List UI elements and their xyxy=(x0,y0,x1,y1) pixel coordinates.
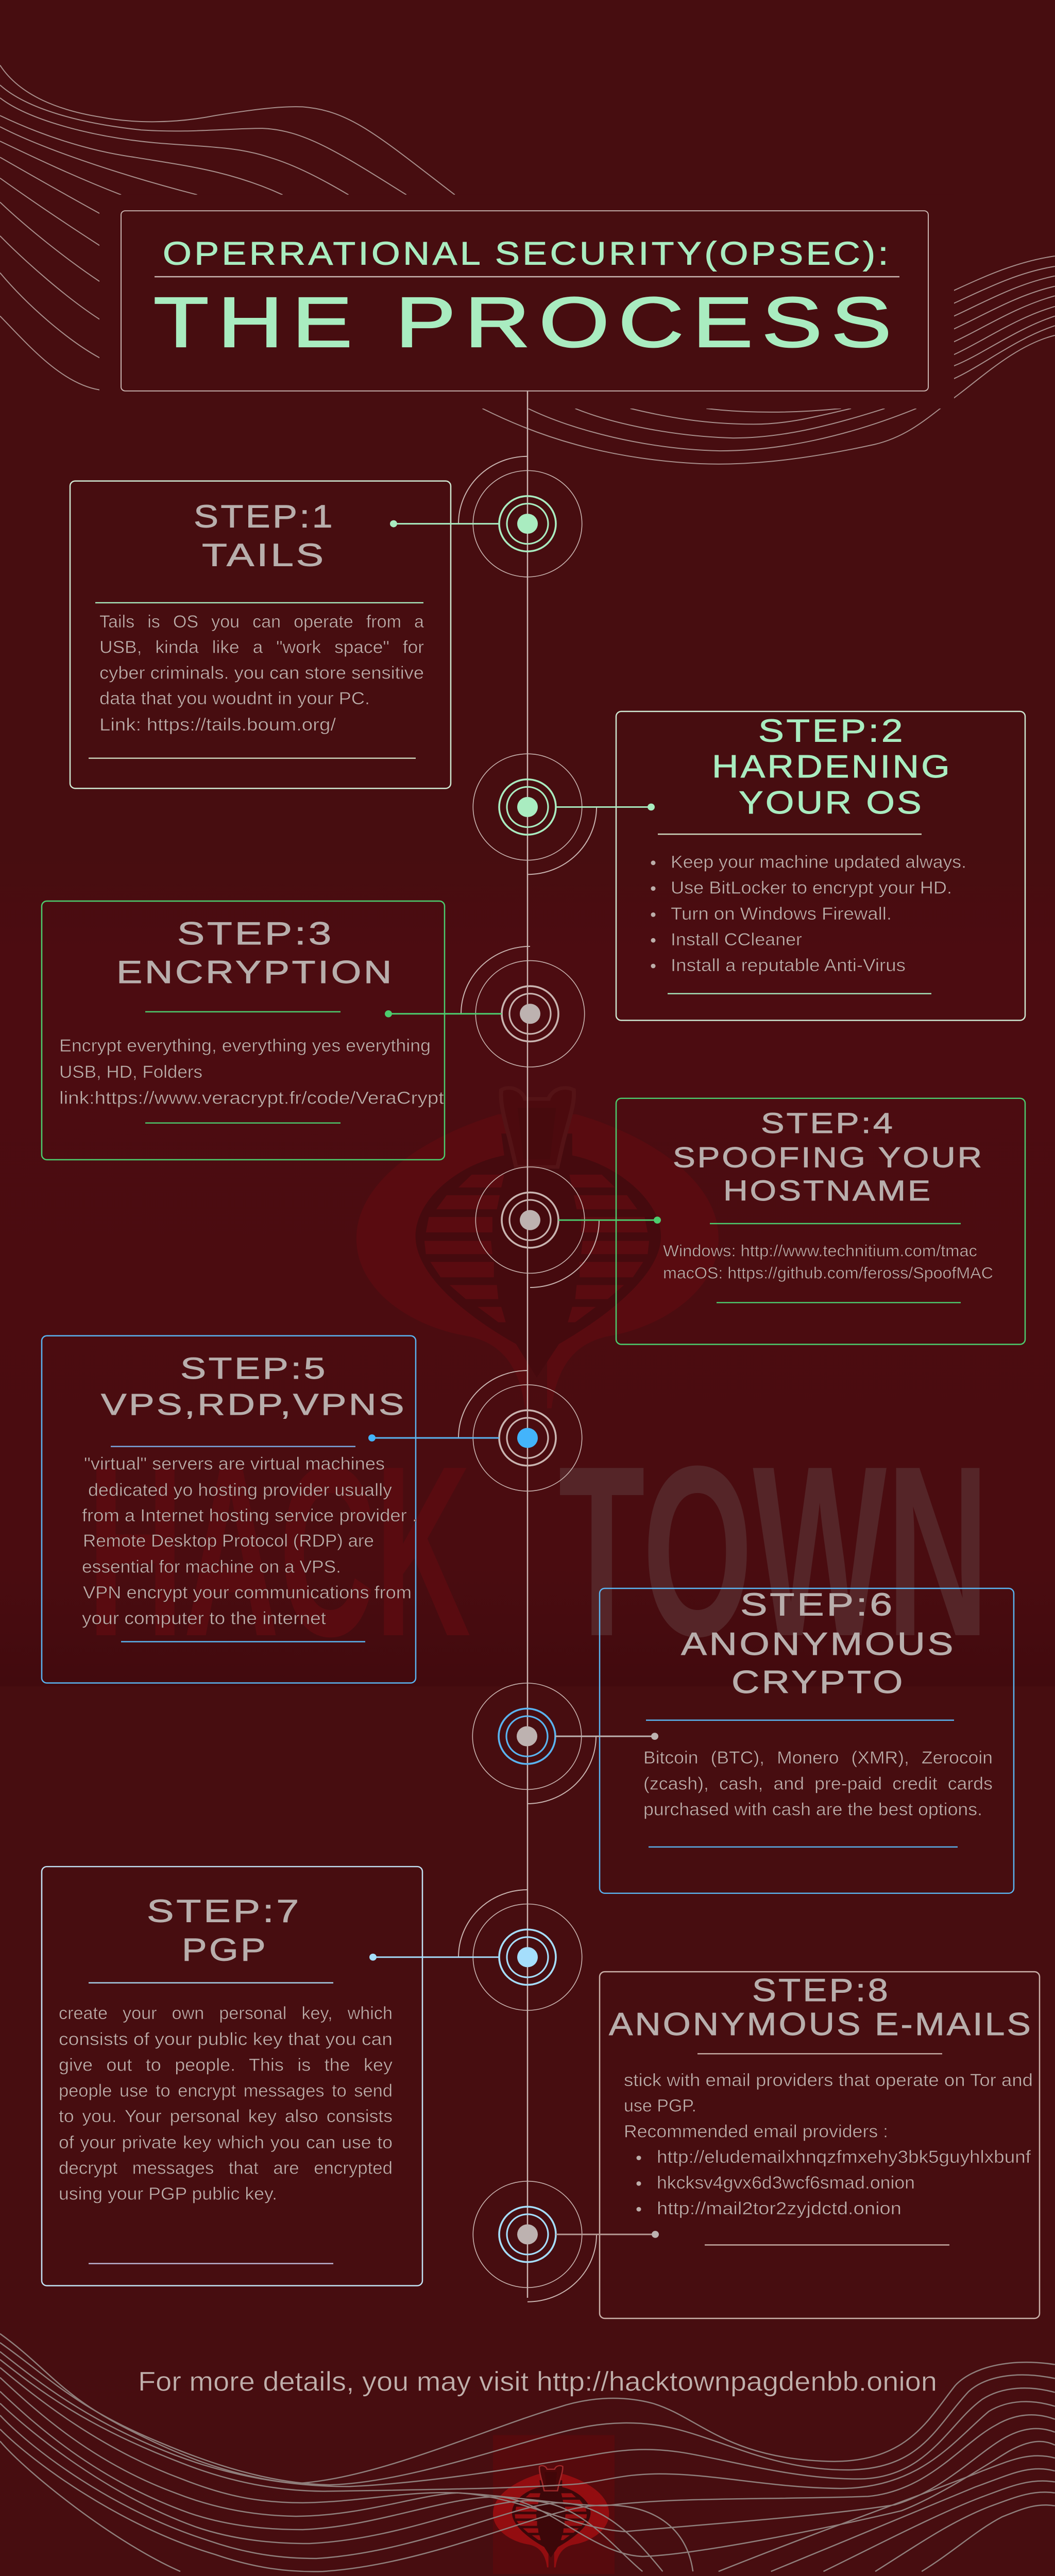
body: step 4 xyxy=(663,1242,993,1282)
node: step 3 xyxy=(385,946,585,1067)
body: step 7: of your private key which you can use to xyxy=(59,2133,393,2153)
body: step 3: USB, HD, Folders xyxy=(59,1062,202,1082)
body: step 4: Windows: http://www.technitium.com/tmac xyxy=(663,1242,977,1260)
heading: step 1 xyxy=(194,499,335,573)
panel: step 2 xyxy=(616,711,1025,1020)
body: step 1: USB, kinda like a "work space" for xyxy=(99,638,424,657)
body: step 8 xyxy=(624,2071,1033,2218)
background image band xyxy=(0,855,1055,1686)
body: step 7: give out to people. This is the key xyxy=(59,2056,393,2075)
top right wave lines xyxy=(482,256,1055,464)
list: step 2: Keep your machine updated always. xyxy=(671,853,966,872)
body: step 1: cyber criminals. you can store sensitive xyxy=(99,664,424,683)
heading: step 1: STEP:1 xyxy=(194,499,335,534)
title line: the process: THE PROCESS xyxy=(154,282,900,362)
bottom cobra backdrop xyxy=(493,2435,615,2574)
heading: step 2: YOUR OS xyxy=(739,785,924,821)
body: step 3 xyxy=(59,1036,444,1108)
heading: step 4: HOSTNAME xyxy=(723,1175,932,1207)
timeline xyxy=(527,391,528,2298)
heading: step 7: STEP:7 xyxy=(147,1893,301,1929)
heading: step 2: HARDENING xyxy=(712,749,952,785)
heading: step 7 xyxy=(147,1893,301,1968)
body: step 7: consists of your public key that you can xyxy=(59,2030,393,2049)
body: step 5: "virtual" servers are virtual machines xyxy=(84,1454,385,1473)
body: step 7: people use to encrypt messages to send xyxy=(59,2081,393,2100)
body: step 5: Remote Desktop Protocol (RDP) are xyxy=(83,1531,374,1551)
node: step 4 xyxy=(475,1167,661,1287)
body: step 8: use PGP. xyxy=(624,2096,696,2116)
heading: step 3 xyxy=(116,916,394,990)
title mask xyxy=(99,195,954,409)
node: step 7 xyxy=(369,1890,582,2010)
heading: step 2: STEP:2 xyxy=(758,713,905,749)
body: step 6: Bitcoin (BTC), Monero (XMR), Zerocoin xyxy=(643,1748,993,1768)
panel: step 4 xyxy=(616,1098,1025,1344)
body: step 5: essential for machine on a VPS. xyxy=(82,1557,341,1577)
heading: step 5 xyxy=(101,1351,406,1421)
body: step 8: http://eludemailxhnqzfmxehy3bk5guyhlxbunf xyxy=(657,2148,1031,2167)
body: step 3: Encrypt everything, everything yes everything xyxy=(59,1036,431,1056)
body: step 8: Recommended email providers : xyxy=(624,2122,888,2141)
panel: step 8 xyxy=(600,1972,1040,2318)
body: step 6 xyxy=(643,1748,993,1819)
heading: step 6: CRYPTO xyxy=(731,1665,905,1700)
body: step 1: data that you woudnt in your PC. xyxy=(99,689,370,708)
heading: step 8: STEP:8 xyxy=(752,1972,890,2008)
node: step 5 xyxy=(368,1370,582,1491)
node: step 2 xyxy=(473,754,655,874)
panel: step 7 xyxy=(42,1867,422,2286)
body: step 1: Link: https://tails.boum.org/ xyxy=(99,715,336,735)
heading: step 1: TAILS xyxy=(202,537,326,573)
body: step 4: macOS: https://github.com/feross/SpoofMAC xyxy=(663,1264,993,1282)
heading: step 7: PGP xyxy=(182,1932,268,1968)
body: step 7: using your PGP public key. xyxy=(59,2184,277,2204)
body: step 1: Tails is OS you can operate from a xyxy=(99,612,424,632)
panel: step 1 xyxy=(70,481,451,788)
panel: step 5 xyxy=(42,1336,417,1683)
heading: step 5: VPS,RDP,VPNS xyxy=(101,1387,406,1421)
heading: step 8: ANONYMOUS E-MAILS xyxy=(609,2007,1033,2042)
heading: step 8 xyxy=(609,1972,1033,2042)
top left wave lines xyxy=(0,65,455,390)
watermark: HACK TOWN: HACK xyxy=(88,1416,471,1687)
body: step 8: http://mail2tor2zyjdctd.onion xyxy=(657,2199,901,2218)
heading: step 6 xyxy=(681,1587,956,1700)
bottom wave lines xyxy=(0,2334,1055,2571)
panel: step 6 xyxy=(600,1587,1014,1893)
title line: operational security: OPERRATIONAL SECURITY(OPSEC): xyxy=(163,235,891,272)
heading: step 6: ANONYMOUS xyxy=(681,1626,956,1662)
node: step 1 xyxy=(390,456,582,577)
heading: step 4 xyxy=(673,1107,984,1207)
panel: step 3 xyxy=(42,901,445,1160)
body: step 8: hkcksv4gvx6d3wcf6smad.onion xyxy=(657,2173,915,2193)
title panel xyxy=(121,211,928,391)
body: step 1 xyxy=(99,612,424,735)
watermark: cobra emblem xyxy=(356,1088,719,1408)
heading: step 3: ENCRYPTION xyxy=(116,955,394,990)
body: step 5: your computer to the internet xyxy=(82,1609,326,1628)
body: step 6: (zcash), cash, and pre-paid credit cards xyxy=(643,1774,993,1794)
body: step 3: link:https://www.veracrypt.fr/code/VeraCrypt xyxy=(59,1089,444,1108)
heading: step 5: STEP:5 xyxy=(180,1351,328,1385)
body: step 5: from a Internet hosting service provider . xyxy=(82,1506,417,1526)
heading: step 2 xyxy=(712,713,952,821)
body: step 5 xyxy=(82,1454,417,1628)
body: step 7: to you. Your personal key also consists xyxy=(59,2107,393,2126)
footer text: For more details, you may visit http://hacktownpagdenbb.onion xyxy=(138,2367,937,2397)
body: step 7: create your own personal key, which xyxy=(59,2004,393,2023)
list: step 2: Install CCleaner xyxy=(671,930,802,950)
list: step 2: Use BitLocker to encrypt your HD. xyxy=(671,878,952,897)
heading: step 4: STEP:4 xyxy=(761,1107,895,1139)
heading: step 6: STEP:6 xyxy=(740,1587,895,1623)
heading: step 3: STEP:3 xyxy=(177,916,334,952)
icon: bottom cobra emblem xyxy=(493,2466,609,2567)
node: step 8 xyxy=(473,2181,659,2302)
body: step 5: VPN encrypt your communications from xyxy=(83,1583,412,1602)
list: step 2: Turn on Windows Firewall. xyxy=(671,905,892,924)
list: step 2 xyxy=(651,853,966,975)
node: step 6 xyxy=(472,1683,658,1804)
body: step 7 xyxy=(59,2004,393,2204)
body: step 7: decrypt messages that are encrypted xyxy=(59,2159,393,2178)
body: step 5: dedicated yo hosting provider usually xyxy=(88,1481,393,1500)
body: step 8: stick with email providers that operate on Tor and xyxy=(624,2071,1033,2090)
list: step 2: Install a reputable Anti-Virus xyxy=(671,956,906,975)
body: step 6: purchased with cash are the best options. xyxy=(643,1800,982,1819)
heading: step 4: SPOOFING YOUR xyxy=(673,1141,984,1173)
